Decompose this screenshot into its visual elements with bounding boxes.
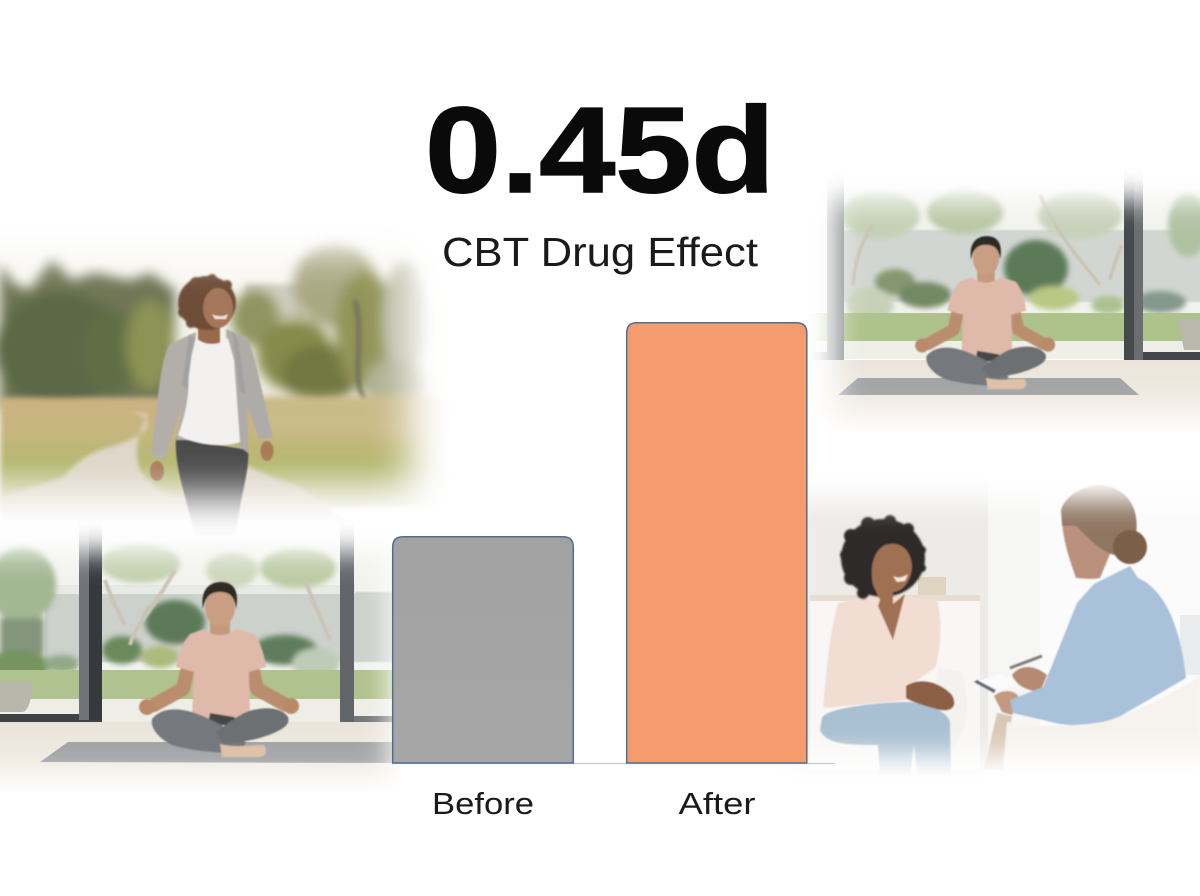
walking woman figure [150, 274, 274, 535]
photo: woman meditating indoors (left) [0, 529, 394, 782]
bar: Before [393, 537, 573, 763]
label: Before: Before [432, 786, 534, 821]
infographic canvas [0, 102, 1200, 814]
landscape background [0, 225, 450, 520]
photo: woman walking outdoors [0, 225, 450, 535]
yoga mat [838, 378, 1139, 395]
yoga mat [40, 742, 392, 763]
therapist figure [974, 485, 1200, 780]
meditating figure [915, 236, 1055, 389]
bar: After [627, 323, 807, 763]
baseline axis [392, 762, 835, 764]
garden room background [816, 178, 1200, 422]
client figure [820, 515, 967, 775]
garden room background [0, 529, 394, 782]
room background [808, 496, 1200, 760]
label: After: After [678, 786, 756, 821]
subtitle: CBT Drug Effect [442, 229, 759, 275]
photo: woman meditating indoors (right) [816, 178, 1200, 422]
meditating figure [139, 582, 299, 757]
photo: therapy session [808, 485, 1200, 772]
title: effect size: 0.45d [425, 82, 775, 218]
